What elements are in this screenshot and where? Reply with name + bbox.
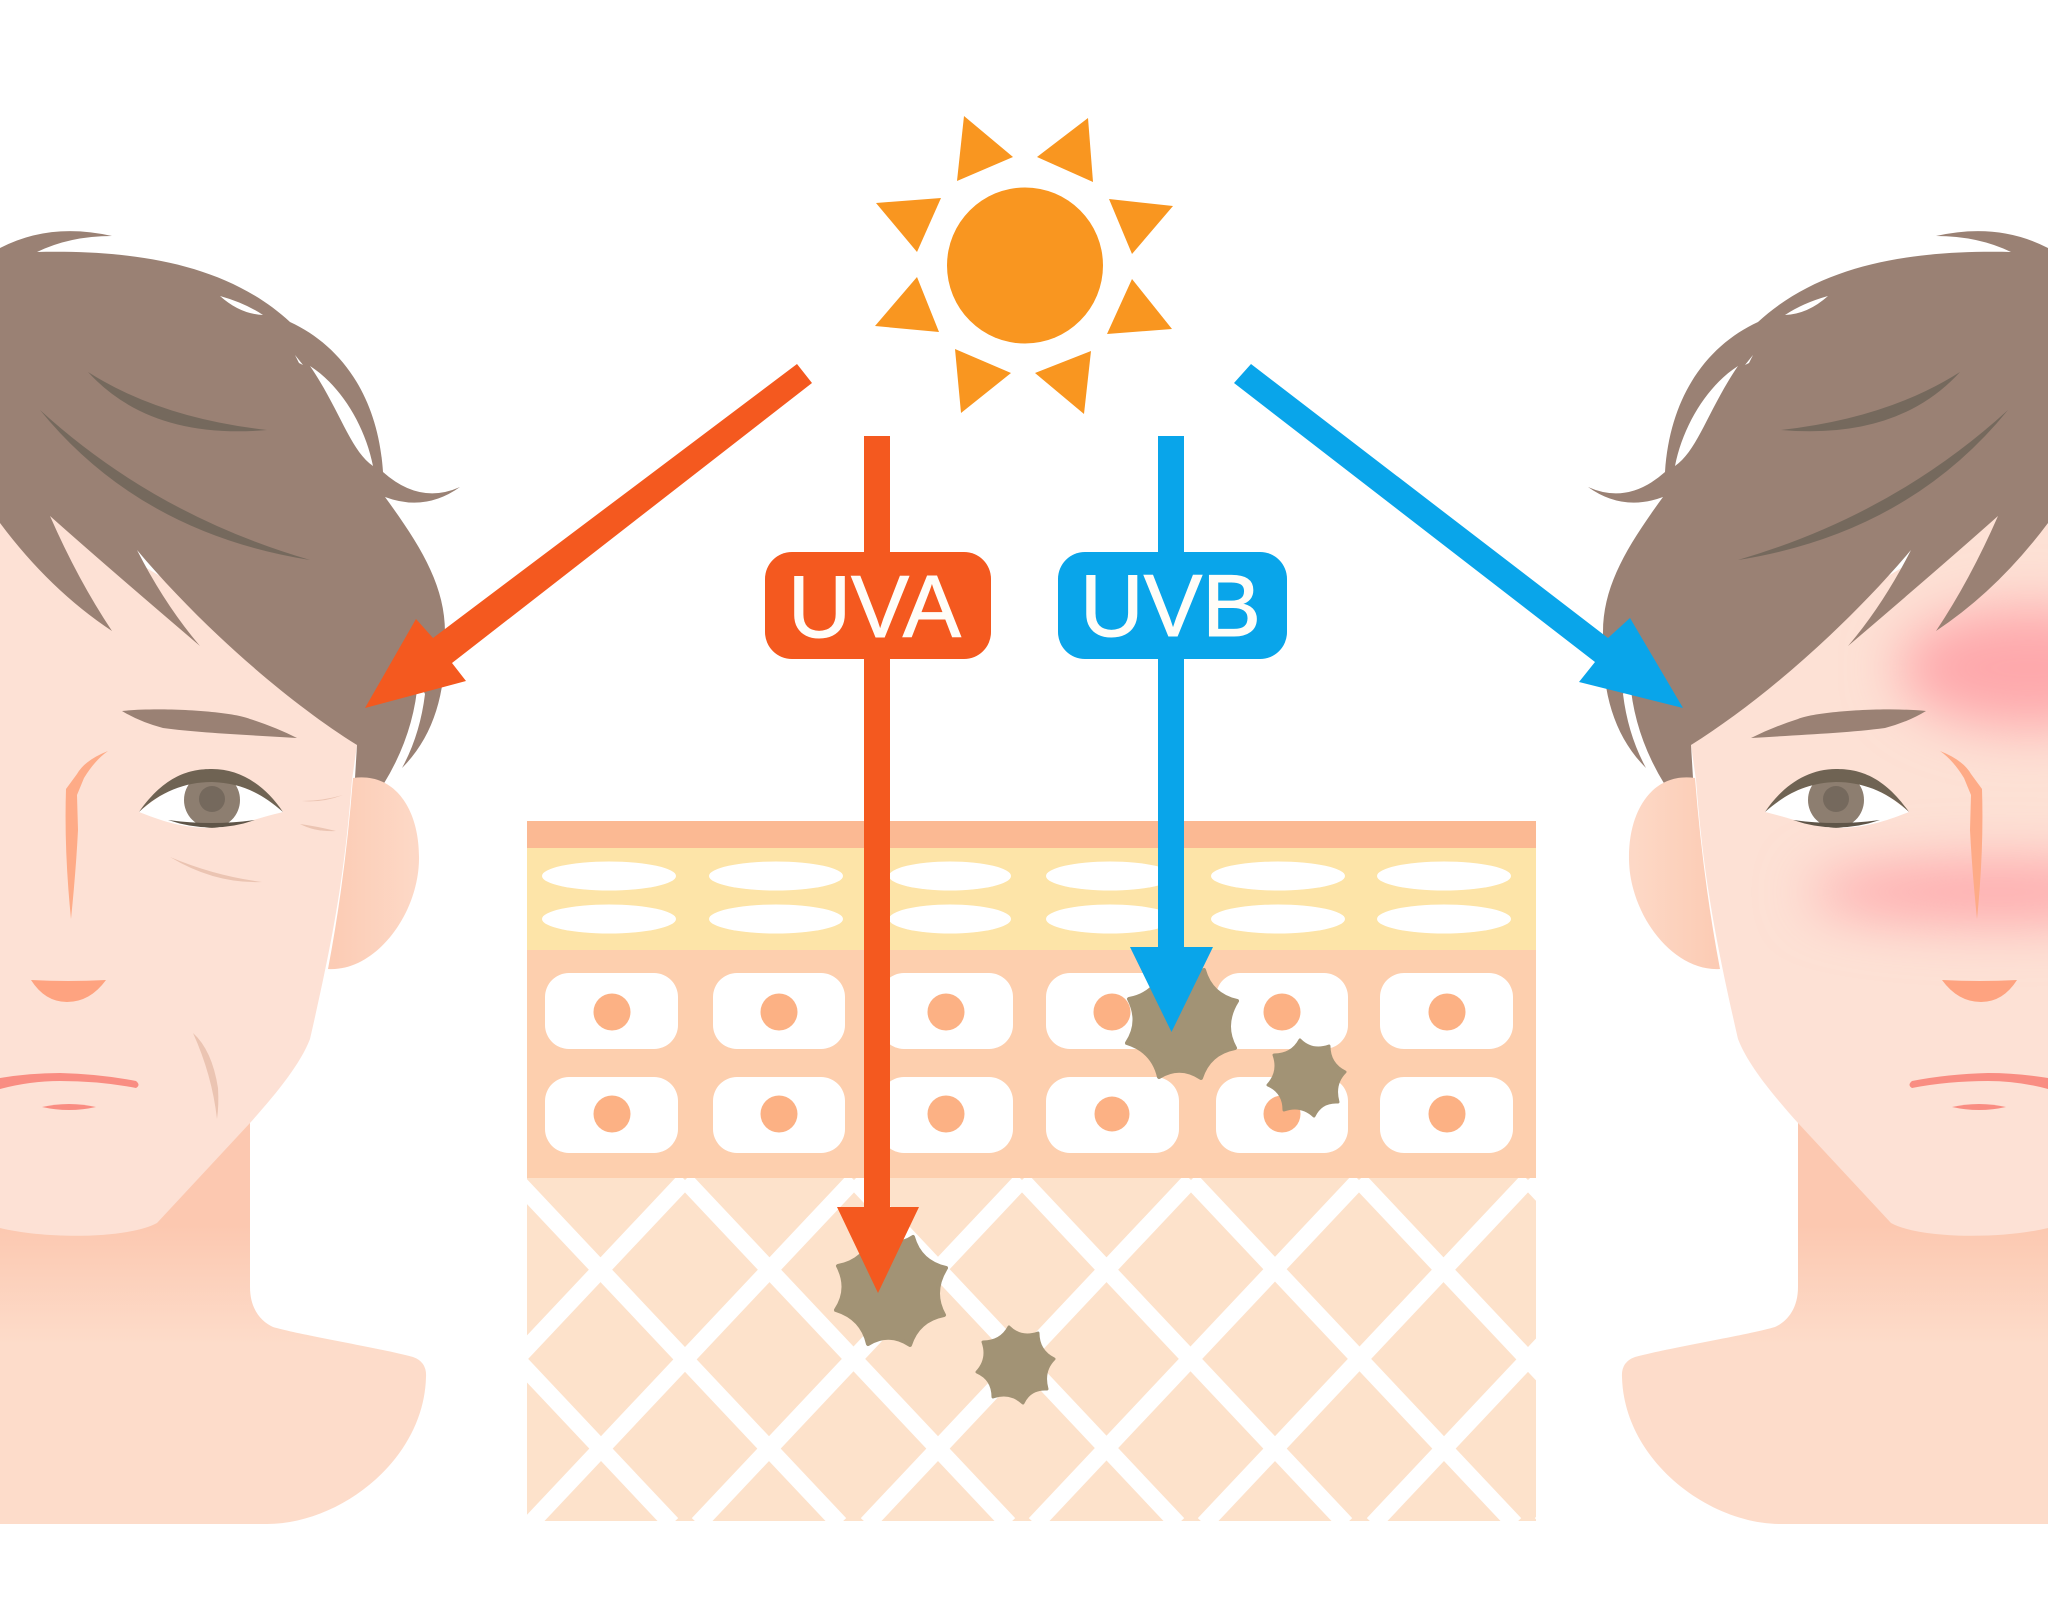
damage spot: UVB small [1268, 1040, 1345, 1116]
ear [328, 777, 419, 969]
neck and shoulder [0, 1100, 426, 1524]
eye [1765, 769, 1909, 828]
damage spot: UVB large [1127, 967, 1237, 1078]
icon: sun [875, 116, 1173, 414]
hair highlights [220, 296, 373, 466]
wrinkles [170, 795, 343, 1119]
nose [1942, 980, 2017, 1002]
arrow: UVB into epidermis [1130, 436, 1213, 1032]
epidermis cell layer [527, 950, 1536, 1178]
ear [1629, 777, 1720, 969]
panel: skin cross-section [527, 821, 1536, 1521]
yellow layer with lipid ovals [527, 848, 1536, 950]
hair [0, 231, 460, 785]
eyebrow [122, 709, 297, 738]
arrow: UVA to left face [365, 364, 812, 708]
face [0, 480, 357, 1236]
face [1691, 480, 2048, 1236]
eyebrow [1751, 709, 1926, 738]
label: UVA: UVA [788, 557, 961, 656]
neck and shoulder [1622, 1100, 2048, 1524]
hair strands [1738, 372, 2008, 560]
lower lip line [1952, 1104, 2006, 1110]
nose [31, 980, 106, 1002]
panel: left face with wrinkles from UVA [0, 231, 460, 1524]
arrow: UVB to right face [1234, 364, 1683, 708]
lower lip line [42, 1104, 96, 1110]
mouth [0, 1073, 138, 1089]
eye [139, 769, 283, 828]
nose line [66, 751, 108, 919]
stratum corneum band [527, 821, 1536, 848]
dermis collagen lattice [527, 1178, 1536, 1521]
redness on cheek [1808, 862, 2048, 922]
nose line [1940, 751, 1982, 919]
damage spot: UVA small [977, 1327, 1054, 1403]
label: UVB: UVB [1080, 556, 1261, 655]
hair [1588, 231, 2048, 785]
redness on forehead [1898, 608, 2048, 728]
damage spot: UVA large [836, 1234, 946, 1345]
hair highlights [1675, 296, 1828, 466]
panel: right face with redness from UVB [1588, 231, 2048, 1524]
arrow: UVA into dermis [837, 436, 919, 1293]
hair strands [40, 372, 310, 560]
mouth [1910, 1073, 2048, 1089]
